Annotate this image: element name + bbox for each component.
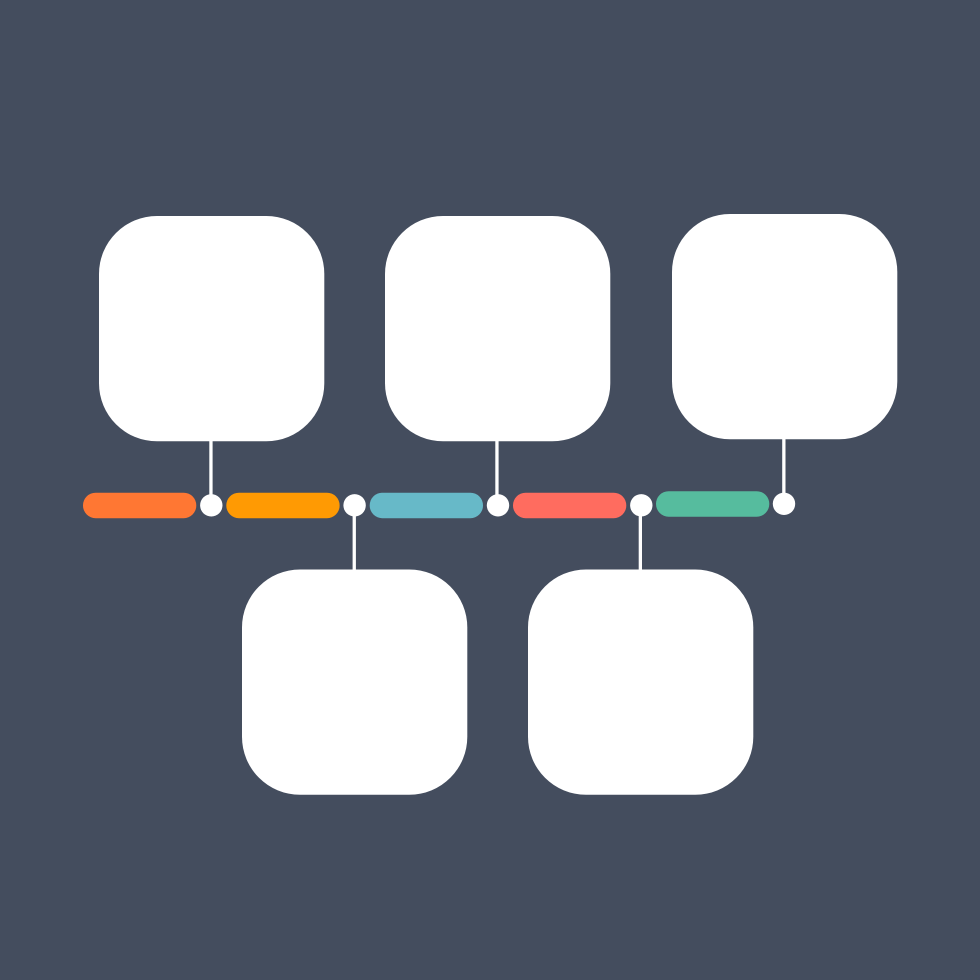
connector lines [209,436,786,572]
teal timeline segment [370,493,483,518]
green timeline segment [656,491,769,517]
panel: bottom left card [242,570,467,795]
timeline node 5 [773,493,795,515]
coral timeline segment [513,493,626,518]
panel: top left card [99,216,324,441]
timeline node 2 [343,494,366,516]
timeline node 3 [487,494,509,516]
timeline node 4 [630,494,652,516]
timeline node 1 [200,494,222,516]
panel: top right card [672,214,897,439]
amber timeline segment [226,493,340,518]
panel: top middle card [385,216,610,441]
panel: bottom right card [528,570,753,795]
orange timeline segment [83,493,196,518]
